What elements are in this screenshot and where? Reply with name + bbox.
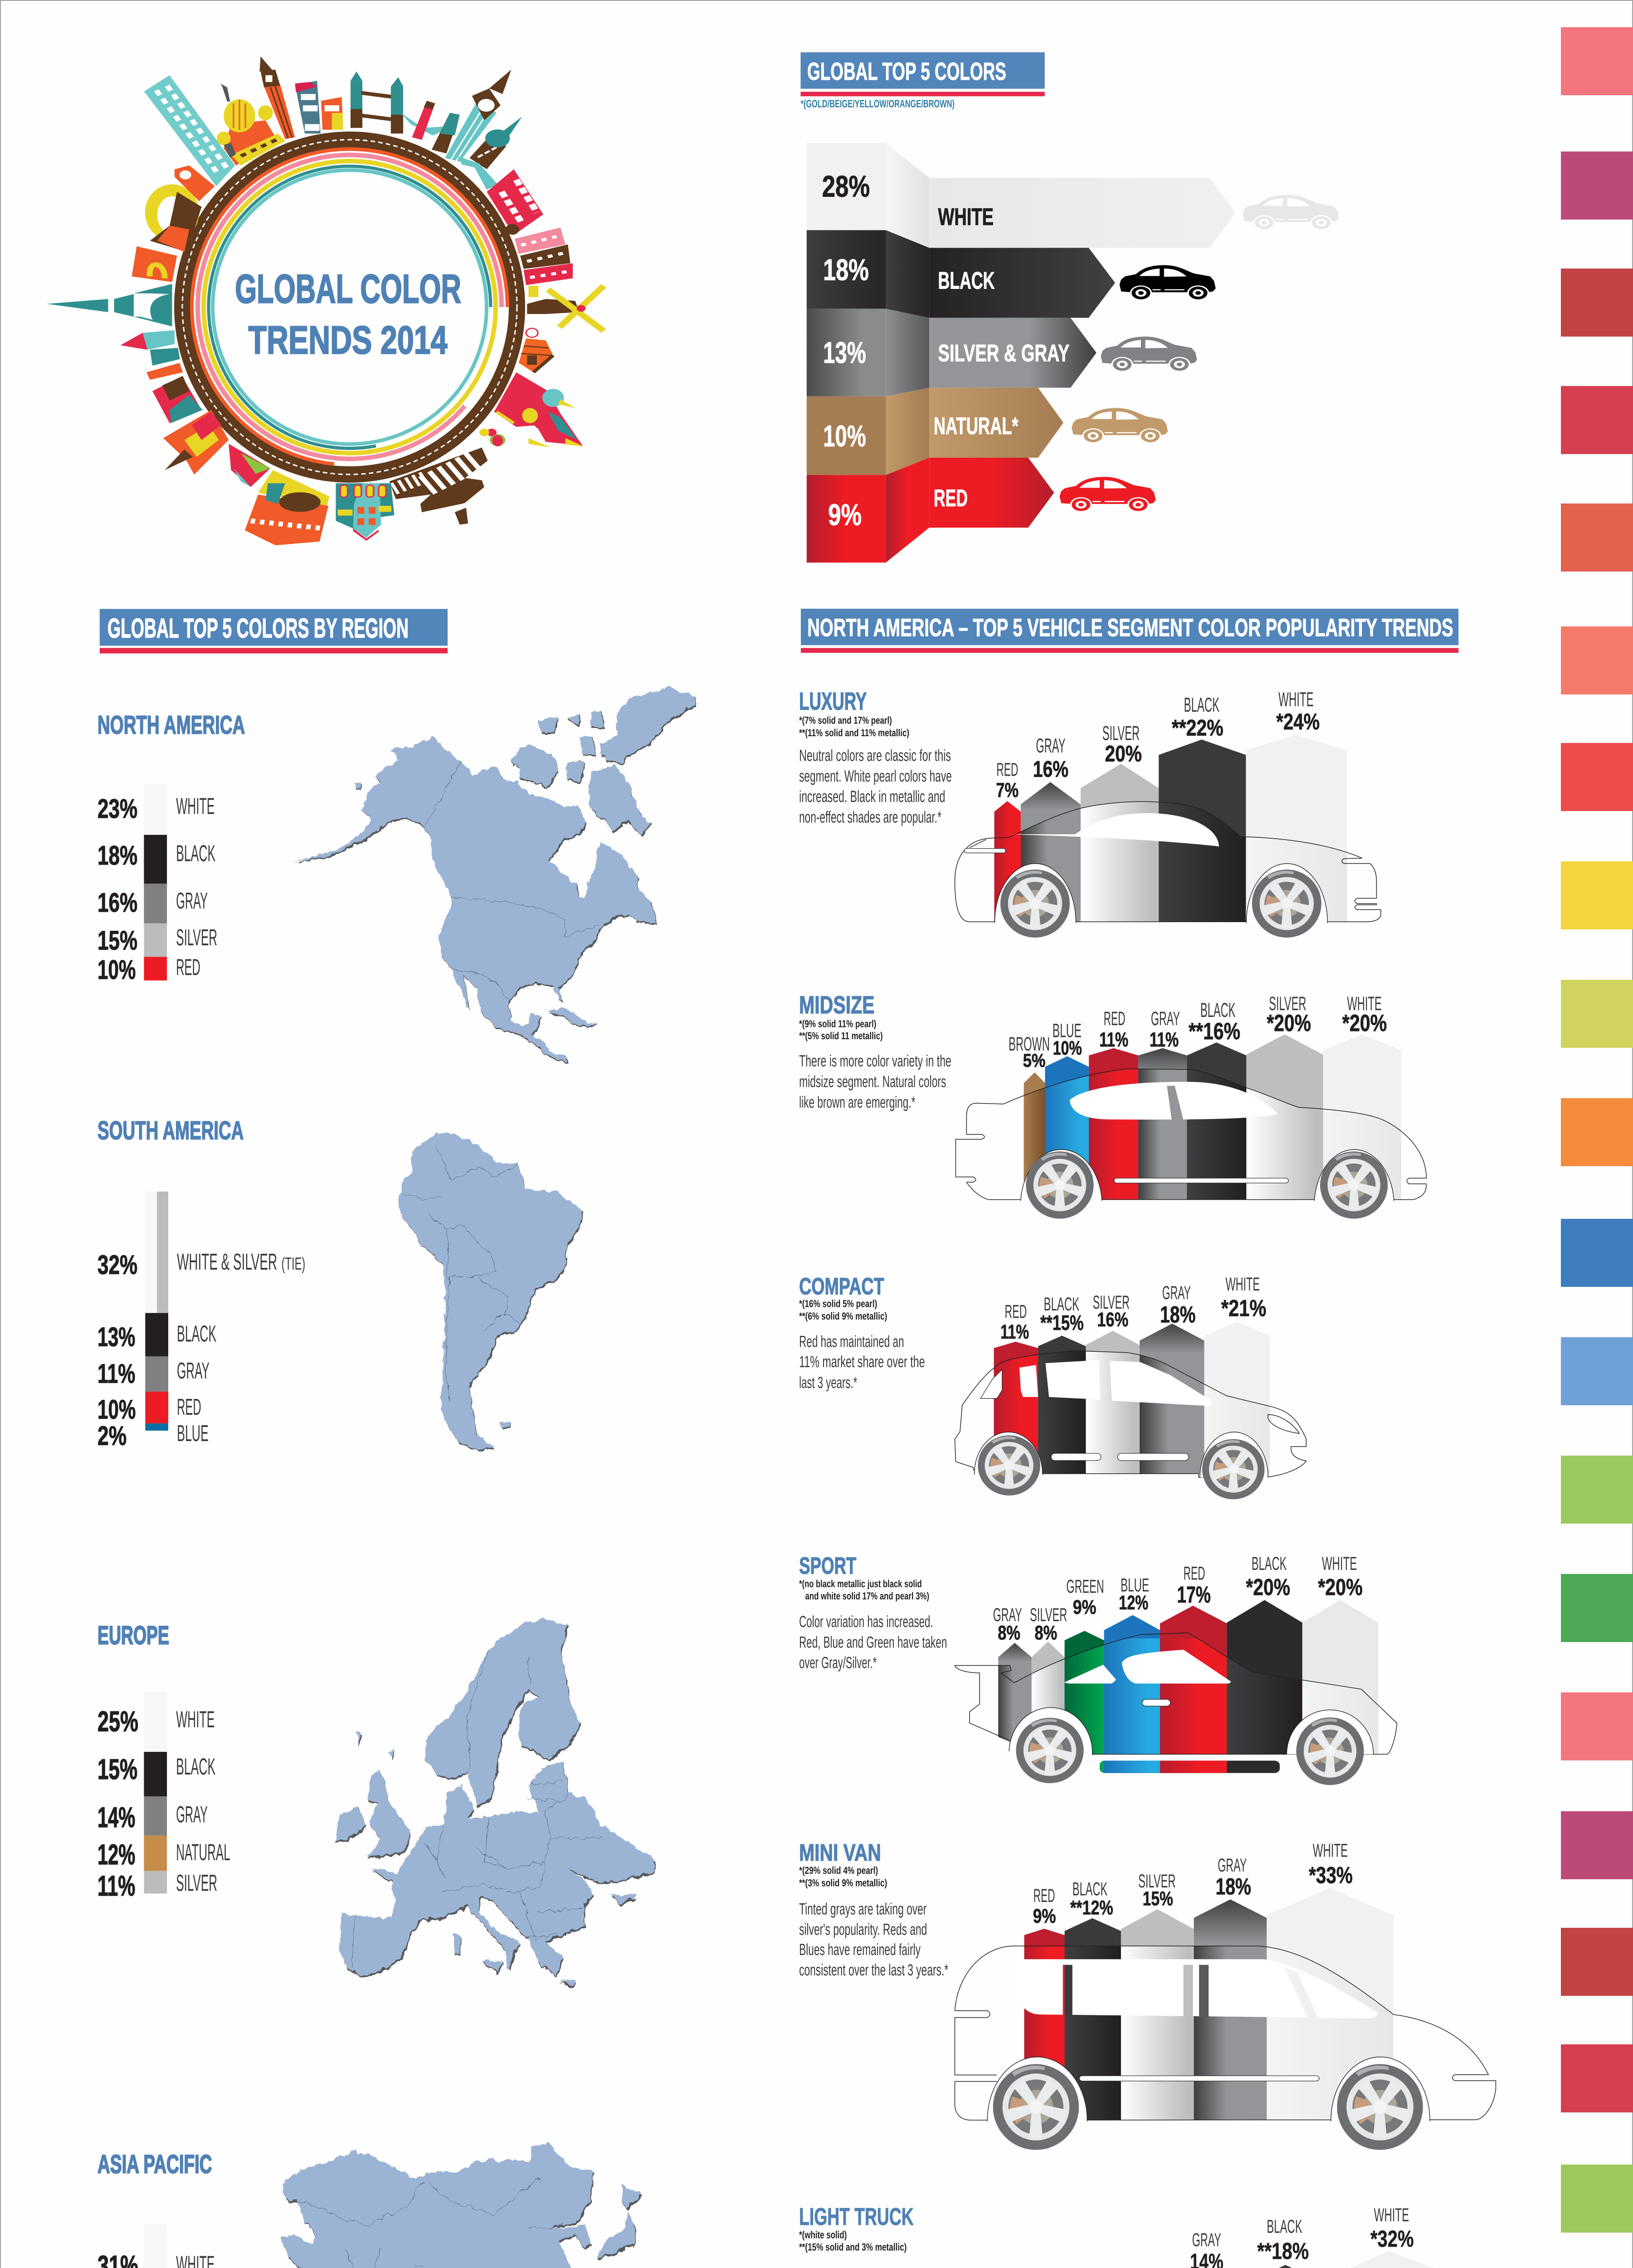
ribbon: red: 9%	[828, 498, 862, 531]
color swatch strip	[1561, 27, 1633, 2268]
icon: townhouses	[295, 81, 343, 133]
labels: sport values: BLACK	[1252, 1553, 1287, 1574]
region heading: south america: SOUTH AMERICA	[97, 1116, 244, 1145]
labels: compact values: **15%	[1040, 1311, 1084, 1334]
labels: compact values: WHITE	[1225, 1274, 1260, 1295]
description: sport	[799, 1613, 947, 1672]
labels: light truck values: *32%	[1370, 2226, 1414, 2252]
labels: sport values: RED	[1184, 1563, 1205, 1584]
labels: light truck values	[1056, 2204, 1414, 2268]
title: TRENDS 2014	[249, 318, 448, 362]
notes: mini van	[799, 1865, 887, 1888]
labels: midsize values	[1009, 993, 1387, 1071]
description: luxury: segment. White pearl colors have	[799, 767, 952, 785]
labels: sport values: *20%	[1318, 1574, 1363, 1600]
icon: double decker bus	[487, 169, 543, 235]
notes: luxury: *(7% solid and 17% pearl)	[799, 715, 892, 726]
legend: europe	[97, 1692, 230, 1902]
legend: europe: WHITE	[176, 1706, 214, 1733]
ribbon: white: WHITE	[938, 203, 994, 230]
labels: compact values: *21%	[1221, 1295, 1266, 1321]
labels: compact values: 16%	[1097, 1309, 1128, 1331]
legend: europe: 11%	[97, 1870, 135, 1902]
icon: bell tower	[259, 56, 295, 139]
description: luxury: increased. Black in metallic and	[799, 788, 945, 806]
labels: mini van values: **12%	[1070, 1897, 1113, 1919]
heading: global top 5 colors	[800, 52, 1045, 96]
heading: north america vehicle segments	[801, 609, 1458, 653]
icon: teal cathedral	[336, 483, 395, 541]
legend: south america	[97, 1192, 305, 1451]
panel: compact and sport	[799, 1273, 1397, 1785]
labels: mini van values: 18%	[1215, 1874, 1251, 1900]
notes: luxury: **(11% solid and 11% metallic)	[799, 728, 909, 739]
labels: mini van values: BLACK	[1072, 1878, 1107, 1899]
segment: light truck: WHITE	[1374, 2204, 1409, 2225]
labels: sport values: SILVER	[1030, 1604, 1067, 1625]
labels: luxury values: GRAY	[1036, 734, 1065, 757]
labels: compact values: RED	[1005, 1301, 1027, 1322]
icon: domed cathedral	[457, 117, 522, 190]
notes: mini van: *(29% solid 4% pearl)	[799, 1865, 878, 1876]
heading: global top 5 colors: GLOBAL TOP 5 COLORS	[807, 57, 1006, 85]
labels: midsize values: *20%	[1267, 1010, 1311, 1036]
icon: clock tower	[445, 69, 512, 162]
labels: midsize values: WHITE	[1347, 993, 1382, 1015]
map: europe	[335, 1619, 655, 1987]
segment: luxury	[799, 687, 1381, 938]
legend: europe: GRAY	[176, 1802, 208, 1828]
legend: north america: 15%	[97, 926, 137, 956]
labels: sport values: GRAY	[993, 1604, 1022, 1625]
segment: sport	[799, 1553, 1397, 1785]
ribbon: black	[807, 230, 1115, 318]
description: midsize: midsize segment. Natural colors	[799, 1073, 946, 1090]
map: asia pacific	[281, 2144, 692, 2268]
labels: sport values: 9%	[1073, 1596, 1096, 1618]
legend: europe: NATURAL	[176, 1840, 230, 1866]
labels: sport values: *20%	[1246, 1574, 1290, 1600]
legend: north america: WHITE	[176, 793, 214, 819]
notes: compact	[799, 1298, 887, 1322]
region heading: asia pacific: ASIA PACIFIC	[97, 2151, 212, 2179]
ribbon: black: BLACK	[938, 267, 994, 294]
labels: mini van values: 9%	[1033, 1905, 1056, 1927]
description: luxury	[799, 747, 952, 826]
notes: luxury	[799, 715, 909, 739]
labels: midsize values: SILVER	[1269, 993, 1306, 1015]
labels: mini van values: *33%	[1309, 1862, 1353, 1888]
labels: midsize values: RED	[1104, 1008, 1125, 1030]
labels: sport values: 8%	[1035, 1622, 1057, 1644]
legend: north america: 18%	[97, 841, 137, 870]
icon: dutch houses	[515, 228, 573, 285]
ribbon: silver and gray	[807, 309, 1097, 396]
panel: global top 5 colors: *(GOLD/BEIGE/YELLOW/ORANGE/BROWN)	[800, 98, 955, 109]
labels: midsize values: 11%	[1099, 1028, 1128, 1051]
labels: midsize values: **16%	[1189, 1018, 1240, 1045]
segment: mini van	[799, 1840, 1496, 2150]
legend: asia pacific	[97, 2224, 230, 2268]
description: compact: last 3 years.*	[799, 1374, 857, 1392]
labels: compact values: 18%	[1160, 1302, 1195, 1328]
labels: sport values: GREEN	[1066, 1576, 1104, 1597]
ribbon: silver and gray: 13%	[823, 336, 866, 369]
legend: europe: 12%	[97, 1839, 135, 1871]
icon: triumphal arch	[132, 246, 177, 282]
heading: luxury: LUXURY	[799, 687, 867, 715]
legend: north america	[97, 784, 217, 985]
legend: north america: RED	[176, 954, 200, 980]
title	[235, 266, 461, 362]
labels: mini van values: RED	[1033, 1885, 1055, 1906]
legend: south america: BLACK	[177, 1321, 216, 1347]
region heading: north america: NORTH AMERICA	[97, 710, 245, 739]
labels: light truck values: **18%	[1257, 2238, 1309, 2264]
notes: midsize: **(5% solid 11 metallic)	[799, 1030, 883, 1041]
labels: sport values: 12%	[1119, 1592, 1148, 1614]
description: midsize: like brown are emerging.*	[799, 1094, 915, 1111]
legend: south america: 10%	[97, 1395, 136, 1425]
icon: stepped houses	[163, 410, 229, 474]
labels: midsize values: 5%	[1023, 1050, 1045, 1071]
panel: regions north and south america	[97, 609, 696, 1452]
description: compact: Red has maintained an	[799, 1333, 904, 1351]
labels: compact values: SILVER	[1093, 1292, 1130, 1313]
legend: north america: 23%	[97, 794, 137, 824]
labels: midsize values: GRAY	[1151, 1008, 1180, 1030]
labels: compact values	[1000, 1274, 1266, 1343]
description: sport: Color variation has increased.	[799, 1613, 933, 1631]
icon: bull ring	[245, 470, 329, 545]
chart: sport car bars	[955, 1600, 1397, 1785]
ribbon: silver and gray: SILVER & GRAY	[938, 340, 1069, 367]
labels: sport values: BLUE	[1121, 1574, 1149, 1595]
description: compact	[799, 1333, 925, 1392]
heading: top 5 by region: GLOBAL TOP 5 COLORS BY REGION	[107, 613, 409, 644]
labels: light truck values: BLACK	[1267, 2216, 1302, 2237]
notes: sport	[799, 1578, 929, 1602]
ribbon: black: 18%	[823, 253, 869, 287]
labels: luxury values: *24%	[1276, 709, 1320, 734]
labels: sport values: 8%	[998, 1622, 1020, 1644]
legend: south america: (TIE)	[282, 1254, 305, 1273]
panel: global top 5 colors	[800, 52, 1339, 562]
icon: barn house	[152, 376, 203, 423]
segment: light truck	[799, 2203, 1531, 2268]
legend: europe: BLACK	[176, 1754, 215, 1780]
heading: top 5 by region	[100, 609, 448, 654]
ribbon: natural: NATURAL*	[934, 412, 1019, 439]
labels: mini van values: GRAY	[1218, 1855, 1247, 1876]
legend: south america: 13%	[97, 1322, 135, 1352]
labels: compact values: 11%	[1000, 1321, 1029, 1343]
ribbon: white	[807, 143, 1235, 248]
ribbon: red	[807, 458, 1054, 562]
legend: north america: BLACK	[176, 841, 215, 866]
labels: luxury values: **22%	[1172, 715, 1224, 740]
legend: south america: 32%	[97, 1250, 137, 1280]
description: sport: Red, Blue and Green have taken	[799, 1633, 947, 1652]
icon: domed palace	[217, 83, 285, 166]
notes: midsize: *(9% solid 11% pearl)	[799, 1018, 876, 1030]
icon: capitol dome	[390, 448, 488, 525]
map: north america	[293, 688, 696, 1063]
icon: windmill	[526, 286, 604, 337]
labels: compact values: BLACK	[1044, 1294, 1079, 1315]
chart: luxury car bars	[955, 735, 1381, 938]
description: midsize	[799, 1052, 951, 1111]
labels: luxury values: 20%	[1105, 741, 1142, 766]
icon: eiffel tower	[47, 284, 172, 327]
description: midsize: There is more color variety in the	[799, 1052, 951, 1070]
legend: south america: GRAY	[177, 1358, 210, 1383]
icon: floral house	[229, 444, 270, 487]
heading: sport: SPORT	[799, 1553, 856, 1579]
icon: colosseum	[145, 184, 202, 252]
labels: compact values: GRAY	[1162, 1282, 1191, 1303]
map: south america	[398, 1134, 583, 1452]
notes: sport: and white solid 17% and pearl 3%)	[805, 1590, 929, 1602]
description: sport: over Gray/Silver.*	[799, 1654, 877, 1672]
legend: north america: 16%	[97, 888, 137, 918]
legend: europe: 25%	[97, 1706, 138, 1738]
description: luxury: non-effect shades are popular.*	[799, 808, 941, 826]
legend: south america: WHITE & SILVER	[177, 1249, 277, 1275]
heading: mini van: MINI VAN	[799, 1840, 881, 1866]
segment: midsize	[799, 991, 1426, 1219]
notes: compact: **(6% solid 9% metallic)	[799, 1310, 887, 1322]
labels: light truck values: GRAY	[1192, 2229, 1221, 2250]
legend: north america: GRAY	[176, 888, 208, 914]
labels: mini van values: WHITE	[1313, 1840, 1348, 1861]
icon: red car	[1059, 477, 1156, 512]
labels: luxury values: WHITE	[1278, 688, 1314, 711]
labels: mini van values: SILVER	[1138, 1871, 1175, 1892]
panel: vehicle segment header and luxury and midsize	[799, 609, 1458, 1219]
icon: tower bridge	[351, 72, 403, 133]
landmarks around the ring	[47, 56, 604, 545]
labels: sport values	[993, 1553, 1363, 1644]
heading: compact: COMPACT	[799, 1273, 884, 1300]
ribbon: natural	[807, 388, 1063, 475]
labels: luxury values: RED	[996, 759, 1018, 780]
labels: sport values: 17%	[1177, 1582, 1211, 1608]
chart: light truck bars	[955, 2251, 1531, 2268]
heading: midsize: MIDSIZE	[799, 991, 875, 1019]
title: GLOBAL COLOR	[235, 266, 461, 311]
description: mini van	[799, 1900, 948, 1979]
description: compact: 11% market share over the	[799, 1353, 925, 1371]
icon: ring road and colored arcs	[182, 140, 517, 474]
labels: midsize values: BLUE	[1053, 1020, 1082, 1041]
labels: midsize values: 11%	[1150, 1028, 1179, 1051]
description: mini van: silver's popularity. Reds and	[799, 1921, 927, 1939]
legend: north america: 10%	[97, 955, 136, 985]
panel: regions europe and asia pacific	[97, 1619, 692, 2268]
segment: light truck: **(15% solid and 3% metallic)	[799, 2241, 907, 2253]
legend: south america: RED	[177, 1394, 201, 1420]
labels: luxury values: SILVER	[1102, 722, 1140, 744]
panel: hero globe with landmarks	[47, 56, 604, 545]
legend: europe: 15%	[97, 1754, 137, 1786]
icon: black car	[1120, 265, 1216, 300]
chart: mini van bars	[955, 1888, 1496, 2150]
notes: light truck	[799, 2229, 907, 2253]
labels: midsize values: BROWN	[1009, 1034, 1050, 1055]
labels: mini van values: 15%	[1143, 1888, 1173, 1910]
description: luxury: Neutral colors are classic for this	[799, 747, 951, 765]
labels: midsize values: BLACK	[1200, 999, 1235, 1022]
labels: luxury values	[996, 688, 1320, 802]
notes: mini van: **(3% solid 9% metallic)	[799, 1877, 887, 1888]
icon: white car	[1243, 195, 1339, 230]
segment: light truck: LIGHT TRUCK	[799, 2203, 914, 2230]
description: mini van: consistent over the last 3 years.*	[799, 1961, 948, 1979]
ribbon: white: 28%	[822, 170, 870, 203]
notes: midsize	[799, 1018, 883, 1041]
legend: north america: SILVER	[176, 924, 217, 950]
icon: tan car	[1072, 408, 1168, 443]
legend: europe: 14%	[97, 1802, 135, 1833]
legend: europe: SILVER	[176, 1870, 217, 1896]
labels: luxury values: BLACK	[1184, 694, 1219, 716]
chart: compact car bars	[955, 1322, 1306, 1499]
notes: compact: *(16% solid 5% pearl)	[799, 1298, 877, 1310]
labels: sport values: WHITE	[1322, 1553, 1357, 1574]
icon: leaning tower	[144, 75, 235, 186]
icon: gray car	[1101, 337, 1197, 372]
labels: luxury values: 7%	[996, 779, 1019, 802]
segment: compact	[799, 1273, 1306, 1499]
labels: luxury values: 16%	[1033, 756, 1068, 782]
chart: midsize car bars	[955, 1034, 1426, 1219]
icon: small houses	[121, 330, 183, 380]
icon: red cathedral	[494, 372, 584, 448]
description: mini van: Tinted grays are taking over	[799, 1900, 926, 1918]
labels: mini van values	[1033, 1840, 1353, 1927]
legend: south america: 11%	[97, 1359, 135, 1389]
icon: trees	[479, 429, 506, 446]
icon: slender tower	[401, 101, 460, 153]
icon: log cabin	[519, 338, 553, 372]
legend: south america: BLUE	[177, 1420, 209, 1446]
description: mini van: Blues have remained fairly	[799, 1941, 921, 1959]
ribbon: natural: 10%	[823, 419, 866, 453]
ribbon: red: RED	[934, 484, 968, 512]
labels: midsize values: 10%	[1053, 1038, 1082, 1059]
notes: sport: *(no black metallic just black solid	[799, 1578, 922, 1589]
legend: south america: 2%	[97, 1421, 127, 1451]
region heading: europe: EUROPE	[97, 1622, 169, 1650]
icon: ornate house	[175, 166, 215, 201]
notes: light truck: *(white solid)	[799, 2229, 847, 2241]
underbody strip	[1100, 1760, 1280, 1773]
labels: midsize values: *20%	[1342, 1010, 1387, 1036]
